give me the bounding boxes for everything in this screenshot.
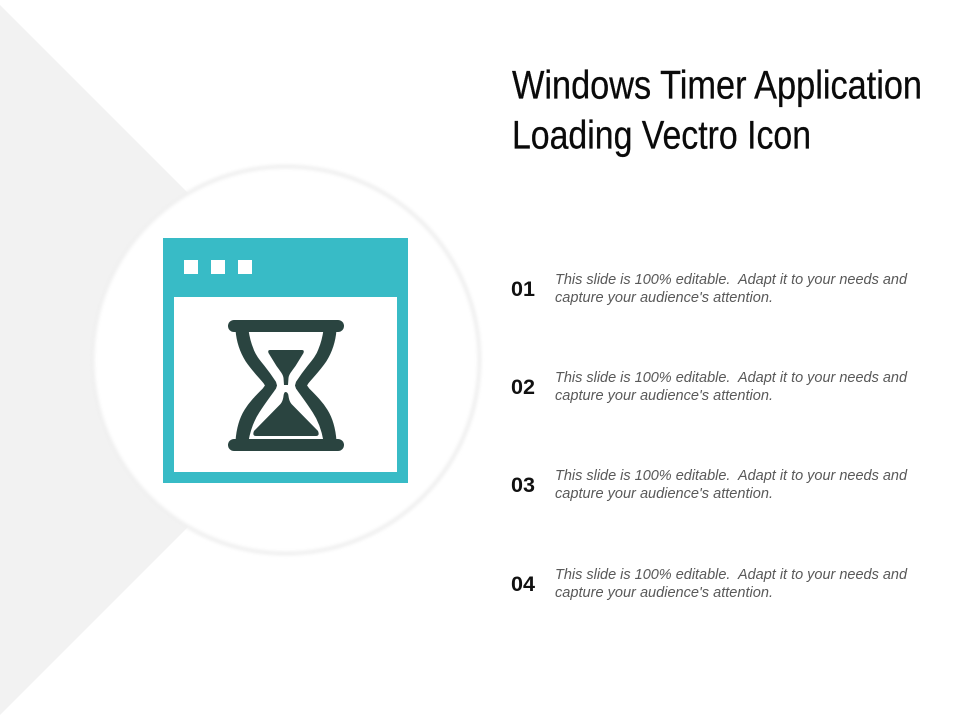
list item 04: 04: [511, 573, 535, 596]
list item 04: [511, 566, 908, 601]
list item 03: This slide is 100% editable. Adapt it to your needs and: [555, 467, 908, 484]
list item 02: capture your audience's attention.: [555, 387, 773, 404]
list item 02: This slide is 100% editable. Adapt it to your needs and: [555, 369, 908, 386]
list item 03: 03: [511, 474, 535, 497]
list item 02: 02: [511, 376, 535, 399]
title: [512, 64, 922, 158]
background triangle: [0, 5, 355, 715]
list item 01: 01: [511, 278, 535, 301]
icon: hourglass: [228, 320, 344, 451]
icon: application window with hourglass: [163, 238, 408, 483]
window control squares: [184, 260, 252, 274]
list item 01: capture your audience's attention.: [555, 289, 773, 306]
circle panel: [90, 164, 482, 556]
list item 04: capture your audience's attention.: [555, 584, 773, 601]
list item 03: capture your audience's attention.: [555, 485, 773, 502]
window content area: [174, 297, 397, 472]
list item 03: [511, 467, 908, 502]
list item 02: [511, 369, 908, 404]
title: Loading Vectro Icon: [512, 114, 811, 158]
window frame: [163, 238, 408, 483]
list item 01: [511, 271, 908, 306]
list item 04: This slide is 100% editable. Adapt it to your needs and: [555, 566, 908, 583]
list item 01: This slide is 100% editable. Adapt it to your needs and: [555, 271, 908, 288]
